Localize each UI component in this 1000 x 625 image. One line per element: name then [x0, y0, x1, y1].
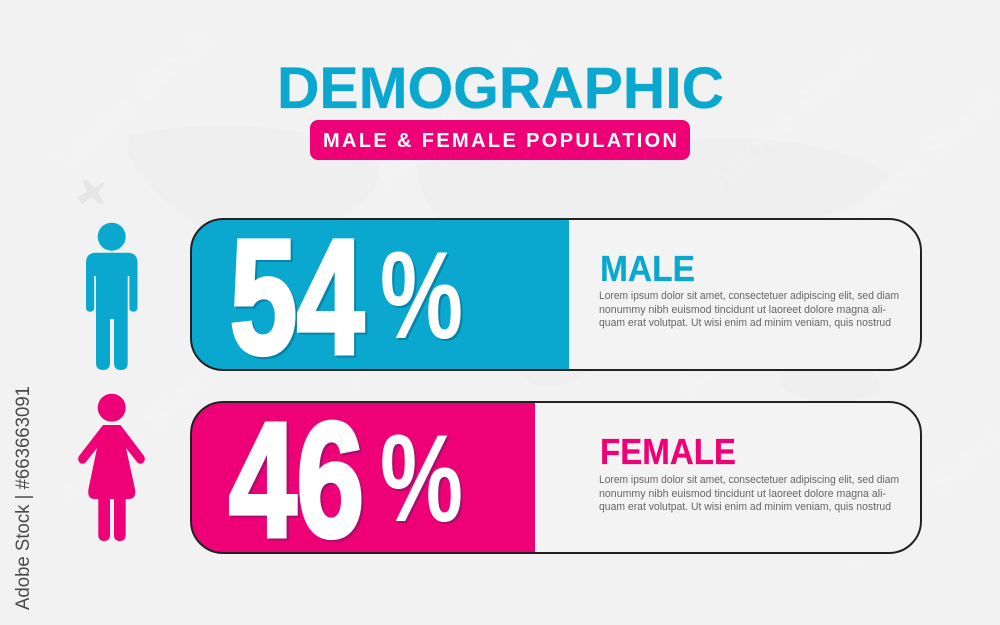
male description	[599, 290, 899, 329]
male description: Lorem ipsum dolor sit amet, consectetuer adipiscing elit, sed diam	[599, 290, 899, 302]
watermark: Adobe Stock	[335, 229, 515, 396]
panel: female	[191, 388, 921, 571]
subtitle badge	[310, 120, 690, 160]
male percent sign: %	[380, 227, 463, 365]
female percentage: 46	[229, 388, 364, 571]
watermark: Adobe Stock	[365, 29, 545, 196]
female description: nonummy nibh euismod tincidunt ut laoreet dolore magna ali-	[599, 488, 886, 500]
background world map	[128, 126, 890, 403]
title: DEMOGRAPHIC	[277, 56, 724, 121]
icon: airplane	[77, 180, 105, 205]
female bar	[191, 402, 535, 553]
watermark: Adobe Stock	[50, 349, 230, 516]
stock id text: Adobe Stock | #663663091	[13, 386, 34, 610]
panel: male	[191, 205, 921, 388]
male description: quam erat volutpat. Ut wisi enim ad minim veniam, quis nostrud	[599, 317, 891, 329]
female description	[599, 474, 899, 513]
female percent sign: %	[380, 410, 463, 548]
watermark: Adobe Stock	[670, 239, 850, 406]
male percentage: 54	[230, 205, 364, 388]
watermark: Adobe Stock	[40, 19, 220, 186]
watermark: Adobe Stock	[700, 34, 880, 201]
female description: quam erat volutpat. Ut wisi enim ad minim veniam, quis nostrud	[599, 501, 891, 513]
female heading: FEMALE	[600, 431, 736, 472]
icon: male figure	[86, 223, 138, 370]
subtitle badge: MALE & FEMALE POPULATION	[323, 130, 677, 152]
male bar	[191, 219, 569, 370]
female description: Lorem ipsum dolor sit amet, consectetuer adipiscing elit, sed diam	[599, 474, 899, 486]
male description: nonummy nibh euismod tincidunt ut laoreet dolore magna ali-	[599, 304, 886, 316]
male heading: MALE	[600, 248, 695, 289]
icon: female figure	[78, 394, 145, 541]
